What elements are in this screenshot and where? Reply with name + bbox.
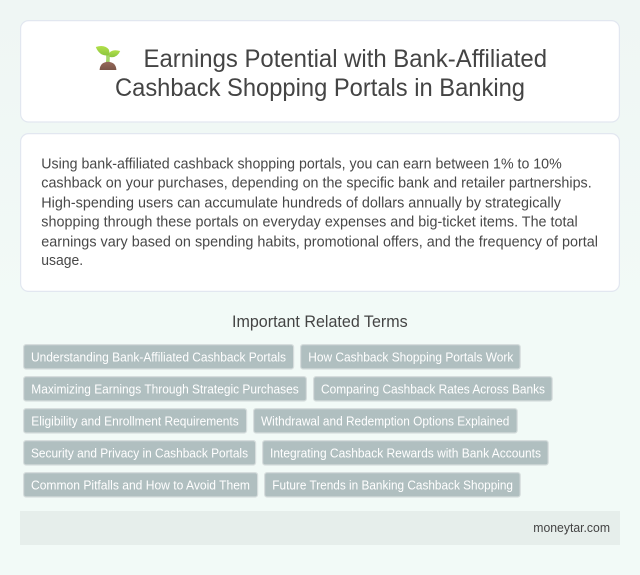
heading: important related terms: Important Related Terms bbox=[232, 312, 408, 331]
tag: Security and Privacy in Cashback Portals bbox=[31, 446, 248, 460]
tag: Future Trends in Banking Cashback Shopping bbox=[272, 478, 513, 492]
summary text bbox=[41, 155, 598, 269]
panel: title card bbox=[21, 21, 619, 122]
summary text: Using bank-affiliated cashback shopping portals, you can earn between 1% to 10% bbox=[41, 155, 562, 172]
tag: Maximizing Earnings Through Strategic Purchases bbox=[31, 382, 299, 396]
title: Cashback Shopping Portals in Banking bbox=[115, 75, 525, 102]
tag: How Cashback Shopping Portals Work bbox=[308, 350, 514, 364]
title bbox=[115, 46, 547, 102]
tag bbox=[254, 409, 517, 433]
tag bbox=[24, 345, 294, 369]
tag: Understanding Bank-Affiliated Cashback Portals bbox=[31, 350, 286, 364]
tag: Common Pitfalls and How to Avoid Them bbox=[31, 478, 250, 492]
icon: seedling bbox=[96, 46, 120, 70]
tag: Eligibility and Enrollment Requirements bbox=[31, 414, 239, 428]
footer bar bbox=[20, 511, 620, 545]
tag bbox=[314, 377, 552, 401]
tag: Integrating Cashback Rewards with Bank Accounts bbox=[270, 446, 541, 460]
tag bbox=[24, 473, 258, 497]
summary text: usage. bbox=[41, 252, 83, 269]
panel: summary card bbox=[21, 134, 619, 291]
title: Earnings Potential with Bank-Affiliated bbox=[144, 46, 547, 73]
summary text: cashback on your purchases, depending on the specific bank and retailer partnerships. bbox=[41, 174, 592, 192]
tag list bbox=[24, 345, 552, 497]
tag: Comparing Cashback Rates Across Banks bbox=[321, 382, 545, 396]
tag bbox=[265, 473, 520, 497]
tag bbox=[24, 409, 247, 433]
tag bbox=[263, 441, 548, 465]
tag bbox=[24, 377, 306, 401]
tag bbox=[301, 345, 520, 369]
summary text: earnings vary based on spending habits, promotional offers, and the frequency of portal bbox=[41, 233, 598, 250]
summary text: shopping through these portals on everyday expenses and big-ticket items. The total bbox=[41, 213, 578, 230]
summary text: High-spending users can accumulate hundreds of dollars annually by strategically bbox=[41, 194, 561, 211]
footer source: moneytar.com bbox=[533, 521, 610, 535]
tag bbox=[24, 441, 256, 465]
tag: Withdrawal and Redemption Options Explained bbox=[261, 414, 509, 428]
